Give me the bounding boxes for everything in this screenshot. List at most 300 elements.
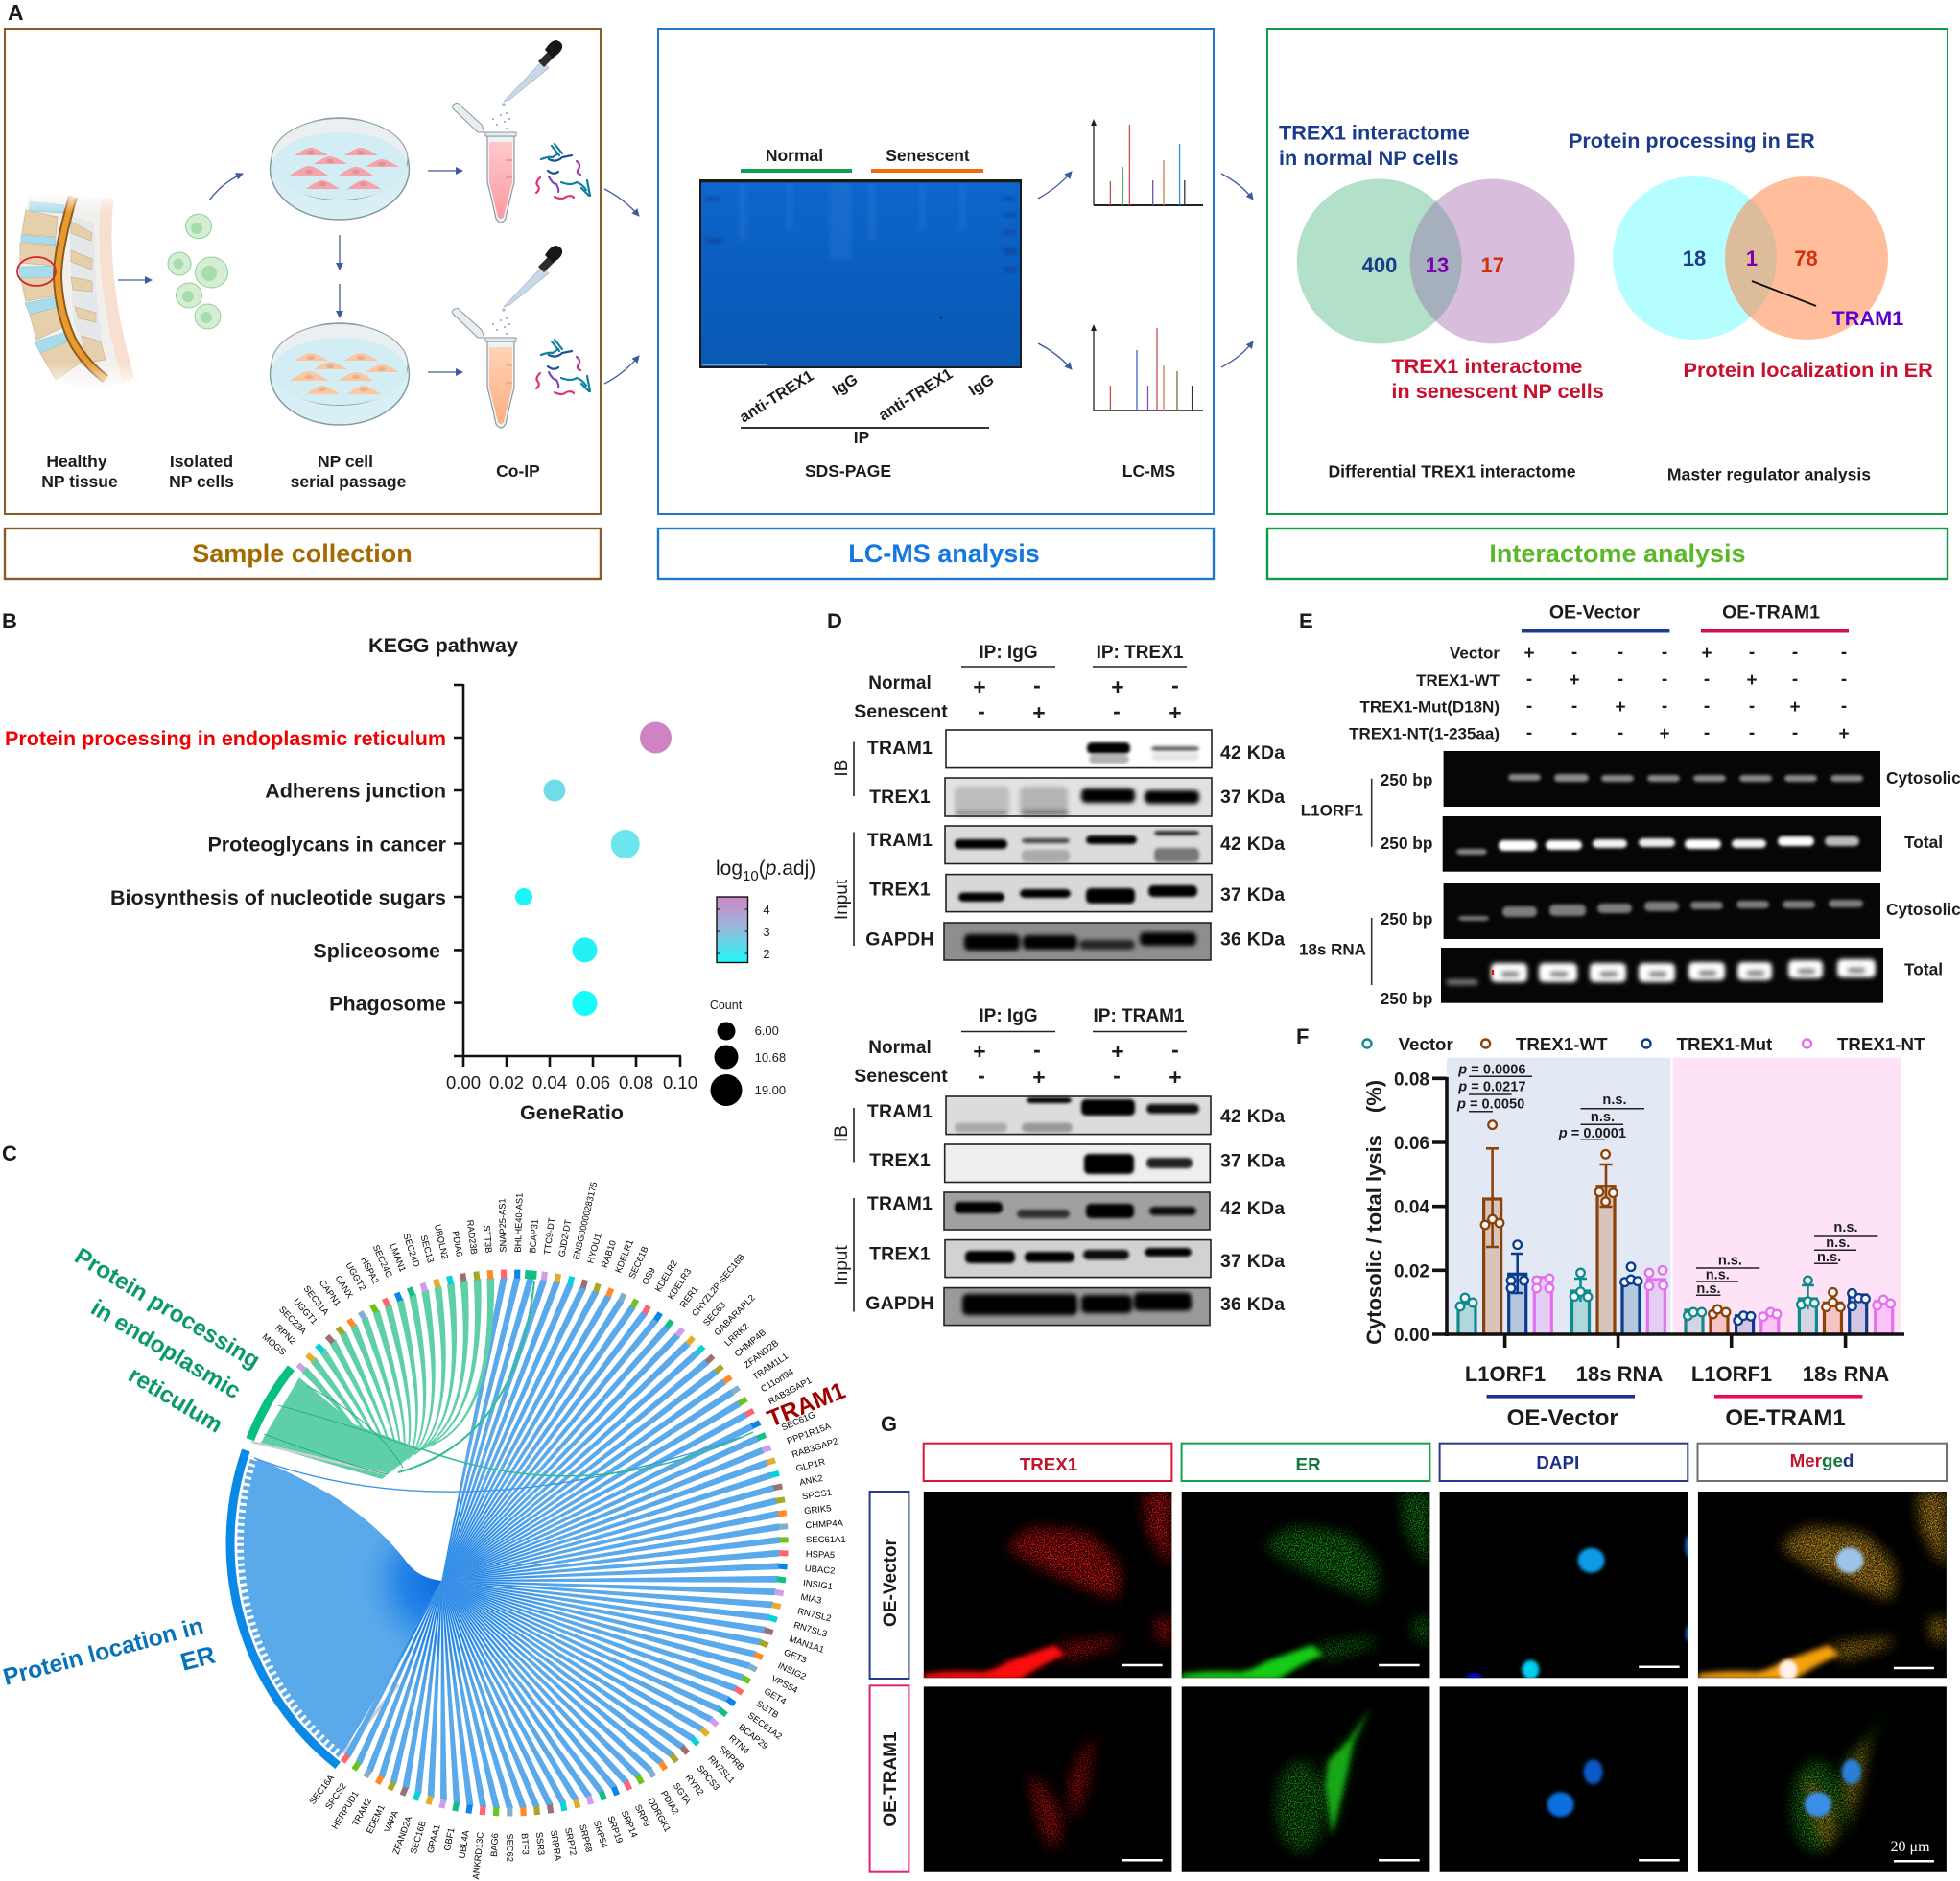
green ribbons	[303, 1279, 493, 1473]
significance annotations	[1456, 1062, 1878, 1297]
header: ER: ER	[1296, 1454, 1321, 1474]
text: normal label: Normal	[766, 146, 823, 165]
row labels: 37 KDa	[1220, 1251, 1285, 1272]
plus minus grid: -	[1749, 696, 1755, 717]
plus minus grid: +	[1523, 644, 1535, 664]
header labels: +	[1111, 1039, 1124, 1064]
group brackets: OE-Vector	[1507, 1405, 1618, 1431]
gene labels: GRIK5	[804, 1502, 832, 1516]
gene labels: HSPA2	[359, 1255, 382, 1285]
gene labels: SRP54	[592, 1819, 610, 1849]
text: SDS-PAGE: SDS-PAGE	[805, 461, 891, 481]
gene labels: PDIA6	[450, 1230, 465, 1258]
row labels: 42 KDa	[1220, 742, 1285, 764]
gene labels: SRP9	[633, 1802, 652, 1828]
icon: normal petri dish	[271, 118, 409, 220]
text: step labels: Co-IP	[496, 461, 540, 481]
header: DAPI	[1440, 1444, 1688, 1481]
gene labels: RAB10	[599, 1239, 618, 1269]
blot: IB TRAM1	[946, 1096, 1211, 1135]
significance annotations: n.s.	[1826, 1235, 1850, 1251]
blot: GAPDH	[944, 923, 1211, 960]
gene labels: DDRGK1	[646, 1796, 673, 1834]
text: lane labels: anti-TREX1	[876, 365, 956, 424]
row labels	[865, 1101, 1285, 1315]
caption: LC-MS analysis	[658, 529, 1214, 579]
label: protein processing sector: Protein processing	[70, 1243, 264, 1374]
plus minus grid: -	[1749, 723, 1755, 743]
plus minus grid: -	[1749, 643, 1755, 663]
bubbles	[515, 721, 672, 1016]
row label: OE-TRAM1	[870, 1685, 909, 1872]
bar: normal	[741, 169, 852, 173]
header labels: +	[1111, 674, 1124, 699]
row labels: GAPDH	[865, 929, 934, 950]
colour legend	[716, 858, 815, 963]
gene labels: CRYZL2P-SEC16B	[689, 1252, 746, 1318]
header labels	[854, 1006, 1187, 1090]
x tick labels: 0.02	[489, 1072, 524, 1093]
text: step labels: Isolated	[170, 452, 233, 471]
panel label G: G	[881, 1412, 897, 1436]
row labels: 36 KDa	[1220, 1294, 1285, 1315]
header: DAPI: DAPI	[1536, 1452, 1579, 1472]
text: lane labels: anti-TREX1	[737, 367, 816, 426]
chord: blue fan to ER sector	[237, 1456, 442, 1758]
significance annotations: n.s.	[1718, 1253, 1742, 1268]
x tick labels: 0.10	[663, 1072, 697, 1093]
y axis title: Cytosolic / total lysis	[1362, 1135, 1386, 1345]
gene labels: TTC9-DT	[541, 1217, 556, 1256]
gene labels: SRP72	[563, 1826, 579, 1856]
header labels: -	[1171, 1037, 1179, 1062]
plus minus grid: -	[1704, 723, 1710, 743]
IB and input brackets: Input	[832, 879, 852, 920]
gene labels: OS9	[639, 1266, 657, 1286]
y tick labels: 0.08	[1394, 1070, 1429, 1090]
x tick labels: 0.04	[532, 1072, 567, 1093]
gene labels: RPN2	[273, 1322, 298, 1346]
gene ticks	[296, 1269, 789, 1817]
header labels: IP: TRAM1	[1094, 1006, 1185, 1026]
panel: co-IP westerns TREX1	[832, 643, 1285, 960]
gene labels: GLP1R	[794, 1456, 826, 1473]
gene labels: MIA3	[800, 1591, 823, 1606]
size legend: 19.00	[755, 1083, 786, 1097]
header labels: -	[1171, 672, 1179, 697]
gene labels: C11orf94	[759, 1366, 795, 1394]
gene labels: KDELR1	[612, 1238, 635, 1274]
row label: OE-TRAM1: OE-TRAM1	[881, 1731, 901, 1827]
image: vector merged	[1698, 1492, 1947, 1679]
chart: venn interactome: 17	[1480, 253, 1504, 277]
header labels: +	[1032, 1065, 1046, 1090]
size labels: 250 bp	[1381, 770, 1432, 789]
image: vector ER	[1182, 1492, 1429, 1679]
gene labels: ANK2	[798, 1472, 824, 1488]
gel: L1ORF1 cytosolic	[1444, 751, 1880, 807]
colour legend: 3	[763, 925, 770, 939]
fraction labels: Cytosolic	[1886, 900, 1960, 919]
panel: sample collection	[5, 29, 601, 514]
blot: IB TRAM1	[946, 730, 1212, 768]
caption: sample collection: Sample collection	[192, 539, 413, 568]
panel label D: D	[827, 609, 842, 633]
blot: input TRAM1	[945, 826, 1212, 863]
size legend: Count	[710, 999, 743, 1012]
pathway labels: Proteoglycans in cancer	[207, 833, 447, 856]
plus minus grid: +	[1746, 670, 1758, 691]
sector arc: processing	[250, 1368, 292, 1440]
IB and input brackets: IB	[832, 760, 852, 777]
icon: isolated NP cells	[168, 214, 228, 329]
IB and input brackets: Input	[832, 1245, 852, 1286]
condition labels: TREX1-Mut(D18N)	[1360, 698, 1500, 717]
x labels: 18s RNA	[1803, 1362, 1889, 1386]
icon: senescent petri dish	[271, 323, 409, 425]
group headers	[1522, 602, 1849, 633]
gene labels: UBAC2	[804, 1563, 836, 1576]
condition labels: TREX1-WT	[1416, 671, 1500, 690]
row labels: 42 KDa	[1220, 1198, 1285, 1219]
chart: venn interactome: 400	[1362, 253, 1397, 277]
panel label F: F	[1296, 1024, 1309, 1048]
gene labels: RN7SL1	[706, 1753, 738, 1785]
panel: co-IP westerns TRAM1	[832, 1006, 1285, 1326]
header: Merged: Merged	[1790, 1450, 1854, 1470]
gene labels: GET4	[763, 1685, 789, 1706]
gene labels: RAD23B	[465, 1219, 480, 1255]
row labels: TRAM1	[867, 1101, 933, 1122]
blot: IB TREX1	[945, 1144, 1210, 1182]
gene labels: PDIA2	[659, 1789, 681, 1816]
y tick labels	[1394, 1070, 1429, 1346]
condition labels	[1349, 645, 1500, 743]
gene labels: SEC24C	[371, 1243, 395, 1280]
panel label E: E	[1299, 609, 1313, 633]
plus minus grid: +	[1569, 670, 1580, 691]
plus minus grid: -	[1618, 723, 1623, 743]
gene brackets: L1ORF1	[1301, 802, 1363, 820]
chord: crossing ribbons	[254, 1281, 753, 1492]
gene labels: SEC16A	[307, 1772, 337, 1806]
plus minus grid: -	[1618, 643, 1623, 663]
gene labels: BCAP29	[737, 1722, 770, 1751]
gene labels: UGGT2	[343, 1260, 368, 1292]
gene labels: KDELR2	[652, 1258, 679, 1293]
gene labels: VPS54	[769, 1673, 800, 1695]
plus minus grid: -	[1571, 723, 1577, 743]
plus minus grid: -	[1662, 696, 1667, 717]
IP bracket line	[741, 427, 989, 429]
plus minus grid: -	[1618, 670, 1623, 690]
row labels: TRAM1	[867, 738, 933, 759]
gene labels: RYR2	[683, 1772, 706, 1798]
gene labels	[260, 1181, 846, 1880]
arrows: serial passage	[340, 171, 462, 372]
header labels	[854, 643, 1187, 725]
colour legend: 2	[763, 947, 770, 961]
blot: IB TREX1	[945, 778, 1212, 816]
plus minus grid: +	[1838, 724, 1850, 744]
plus minus grid: -	[1526, 670, 1532, 690]
header labels: -	[1113, 698, 1121, 723]
header labels: IP: IgG	[979, 1006, 1038, 1026]
row label: OE-Vector: OE-Vector	[881, 1538, 901, 1627]
gene labels: UBQLN2	[433, 1223, 451, 1260]
row labels: 42 KDa	[1220, 834, 1285, 855]
gene labels: SEC63	[700, 1300, 727, 1328]
gene labels: SEC24D	[401, 1232, 422, 1268]
gene labels: GPAA1	[424, 1823, 442, 1854]
header labels: -	[978, 698, 985, 723]
icon: spine tissue	[14, 190, 134, 391]
gene labels: KDELR3	[665, 1266, 693, 1301]
gene labels: ZFAND2B	[742, 1337, 780, 1370]
colour legend: log	[716, 858, 743, 880]
group brackets: OE-TRAM1	[1725, 1405, 1846, 1431]
icon: antibodies and proteins bottom	[536, 340, 590, 394]
gene labels: SRP68	[578, 1823, 595, 1853]
fraction labels: Total	[1904, 833, 1943, 852]
condition labels: Vector	[1450, 645, 1500, 663]
x labels: 18s RNA	[1576, 1362, 1663, 1386]
label: protein processing sector: reticulum	[124, 1362, 227, 1438]
blot: input TRAM1	[944, 1192, 1210, 1230]
text: step labels	[41, 452, 540, 491]
panel: bar chart	[1362, 1034, 1925, 1431]
gene labels: PPP1R15A	[785, 1420, 833, 1446]
colour legend: 10	[743, 868, 759, 884]
gene labels: HYOU1	[584, 1233, 603, 1264]
header labels: IP: TREX1	[1097, 643, 1184, 663]
gene labels: MOGS	[260, 1331, 289, 1357]
gene labels: GBF1	[441, 1827, 457, 1851]
pathway labels: Biosynthesis of nucleotide sugars	[110, 886, 446, 909]
image: TRAM1 DAPI	[1439, 1686, 1688, 1872]
y axis title: (%)	[1362, 1080, 1386, 1113]
size legend	[710, 999, 786, 1106]
arrow: cells to normal dish	[209, 174, 243, 200]
text: step labels: NP cells	[169, 472, 234, 491]
pathway labels: Phagosome	[329, 993, 446, 1016]
gene labels: GJD2-DT	[555, 1218, 573, 1258]
chart: venn interactome: 13	[1426, 253, 1449, 277]
text: protein processing in ER: Protein processing in ER	[1569, 129, 1815, 153]
plus minus grid: +	[1789, 697, 1801, 717]
group headers: OE-TRAM1	[1722, 602, 1820, 623]
gene labels: BAG6	[488, 1833, 500, 1857]
plus minus grid: -	[1841, 643, 1847, 663]
icon: normal tube with dropper	[452, 40, 562, 223]
header: TREX1: TREX1	[1020, 1454, 1077, 1474]
arrow: tissue to cells	[118, 279, 152, 281]
significance annotations: n.s.	[1602, 1093, 1627, 1108]
fraction labels	[1886, 768, 1960, 979]
plus minus grid: -	[1792, 643, 1798, 663]
plus minus grid: -	[1571, 696, 1577, 717]
header labels: Normal	[868, 673, 932, 694]
arrows spectra to venn	[1221, 174, 1253, 367]
fraction labels: Cytosolic	[1886, 768, 1960, 788]
text: normal interactome: TREX1 interactome	[1279, 121, 1470, 144]
header labels: +	[1169, 700, 1182, 725]
chord: green mass to processing sector	[251, 1377, 420, 1479]
plus minus grid: -	[1662, 643, 1667, 663]
gene labels: SNAP25-AS1	[496, 1198, 508, 1253]
gene labels: SPCS1	[801, 1487, 833, 1501]
gene labels: RTN4	[727, 1732, 752, 1755]
legend: TREX1-WT	[1516, 1034, 1608, 1054]
y tick labels: 0.00	[1394, 1326, 1429, 1346]
text: senescent interactome	[1391, 354, 1604, 403]
pathway labels: Protein processing in endoplasmic reticulum	[5, 727, 446, 750]
chart: venn ER: 18	[1683, 247, 1706, 270]
blue ribbons	[345, 1278, 780, 1807]
gene labels: TRAM1L1	[750, 1351, 790, 1382]
header labels: Normal	[868, 1038, 932, 1058]
icon: antibodies and proteins top	[536, 144, 590, 199]
chart: lower mass spectrum	[1091, 324, 1203, 411]
row labels: 42 KDa	[1220, 1106, 1285, 1127]
gene labels: SEC61A1	[806, 1534, 846, 1544]
size labels: 250 bp	[1381, 834, 1432, 853]
image: SDS-PAGE gel	[700, 180, 1021, 367]
plus minus grid: +	[1615, 697, 1626, 717]
header labels: +	[1032, 700, 1046, 725]
legend: TREX1-NT	[1837, 1034, 1925, 1054]
gene labels: SSR3	[534, 1831, 547, 1856]
text: lane labels: IgG	[830, 371, 861, 399]
x labels	[1465, 1362, 1889, 1386]
chart: venn interactome	[1297, 178, 1575, 343]
text: lane labels	[737, 365, 997, 426]
label: protein location sector: Protein location in	[1, 1613, 206, 1691]
colour legend: 4	[763, 903, 770, 917]
gene labels: RAB3GAP2	[791, 1435, 839, 1460]
background bands	[1447, 1058, 1901, 1333]
gene labels: BCAP31	[527, 1218, 540, 1254]
gene labels: RN7SL2	[796, 1606, 833, 1623]
header labels: -	[1033, 672, 1041, 697]
text: step labels: NP tissue	[41, 472, 118, 491]
legend: Vector	[1399, 1034, 1453, 1054]
gene labels: CAPN1	[318, 1278, 343, 1308]
plus minus grid: -	[1841, 670, 1847, 690]
row labels: TREX1	[869, 1150, 931, 1171]
significance annotations: p = 0.0006	[1457, 1062, 1526, 1077]
y tick labels: 0.02	[1394, 1261, 1429, 1281]
y tick labels: 0.06	[1394, 1134, 1429, 1154]
header: ER	[1182, 1444, 1429, 1481]
fraction labels: Total	[1904, 960, 1943, 979]
significance annotations: p = 0.0217	[1457, 1079, 1526, 1094]
row labels: 37 KDa	[1220, 1151, 1285, 1172]
gel: 18s total	[1441, 948, 1883, 1003]
panel label A: A	[8, 0, 24, 25]
gene labels: SEC31A	[301, 1283, 332, 1317]
gene labels: LRRK2	[722, 1321, 751, 1348]
row labels: GAPDH	[865, 1293, 934, 1314]
gene labels: SEC61B	[626, 1244, 650, 1280]
plus minus grid: -	[1662, 670, 1667, 690]
gene labels: HSPA5	[806, 1548, 835, 1560]
colour legend: p.adj)	[766, 858, 815, 880]
gene labels: VAPA	[382, 1808, 400, 1834]
significance annotations: p = 0.0050	[1456, 1096, 1524, 1112]
gene labels: BTF3	[520, 1833, 531, 1855]
error bars	[1486, 1148, 1814, 1309]
bars	[1458, 1187, 1893, 1334]
text: senescent label: Senescent	[886, 146, 970, 165]
chart: venn ER: 1	[1746, 247, 1758, 270]
x tick labels	[446, 1072, 697, 1093]
gene labels: SRP14	[620, 1809, 640, 1839]
gene labels: CANX	[333, 1273, 356, 1301]
data points	[1456, 1120, 1895, 1325]
gene ribbons, ticks and labels	[260, 1181, 846, 1880]
IB and input brackets	[832, 742, 854, 946]
gene labels: SGTB	[754, 1698, 781, 1720]
panel: chord diagram	[1, 1181, 849, 1880]
row labels: 37 KDa	[1220, 787, 1285, 808]
plus minus grid: +	[1659, 724, 1670, 744]
plus minus grid: +	[1701, 644, 1712, 664]
legend	[1362, 1034, 1925, 1054]
gene labels: GABARAPL2	[712, 1292, 757, 1337]
gene labels: SEC61G	[780, 1409, 816, 1432]
pathway labels: Adherens junction	[265, 779, 446, 802]
row labels: TRAM1	[867, 1193, 933, 1214]
gene labels: SEC62	[505, 1833, 515, 1862]
header labels: -	[1113, 1063, 1121, 1088]
text: protein localization: Protein localization in ER	[1683, 358, 1933, 382]
label: protein processing sector	[70, 1243, 264, 1438]
axes	[1432, 1077, 1904, 1348]
blot: input TREX1	[945, 1240, 1211, 1278]
text: lane labels: IgG	[966, 371, 997, 399]
colour legend: (	[759, 858, 766, 880]
gene brackets: 18s RNA	[1299, 941, 1366, 959]
panel: PCR gels	[1299, 602, 1960, 1008]
gene labels: ENSG00000283175	[570, 1181, 599, 1260]
gene labels: ANKRD13C	[470, 1831, 485, 1880]
significance annotations: n.s.	[1833, 1220, 1858, 1235]
text: senescent interactome: TREX1 interactome	[1391, 354, 1582, 378]
gene brackets	[1299, 779, 1372, 985]
gene labels: UGGT1	[292, 1296, 320, 1326]
gene labels: CHMP4A	[805, 1517, 844, 1530]
label: protein processing sector: in endoplasmic	[86, 1295, 245, 1404]
plus minus grid	[1523, 643, 1850, 744]
text: IP: IP	[854, 428, 870, 447]
row labels: 36 KDa	[1220, 929, 1285, 950]
axes	[454, 684, 681, 1067]
size legend: 6.00	[755, 1023, 779, 1038]
group brackets	[1487, 1395, 1862, 1431]
caption: sample collection	[5, 529, 601, 579]
row labels: TREX1	[869, 787, 931, 808]
gene labels: SEC23A	[277, 1304, 310, 1336]
header labels: IP: IgG	[979, 643, 1038, 663]
header: Merged	[1698, 1444, 1947, 1481]
x tick labels: 0.00	[446, 1072, 481, 1093]
gene labels: EDEM1	[364, 1803, 387, 1835]
scale text: 20 μm	[1890, 1839, 1930, 1855]
plus minus grid: -	[1526, 723, 1532, 743]
pathway labels	[5, 727, 447, 1016]
gene labels: RN7SL3	[792, 1619, 829, 1638]
